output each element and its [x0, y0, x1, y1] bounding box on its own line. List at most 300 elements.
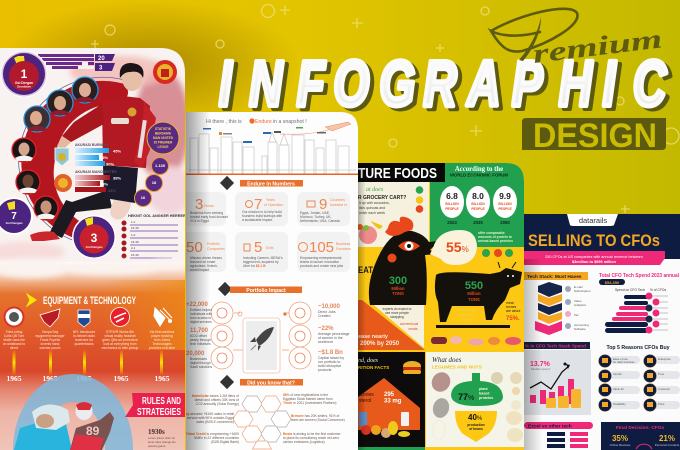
impact figures right: [318, 304, 350, 372]
bar chart: Burnley vs Manchester United: AKURASI MANCHESTER: [75, 170, 117, 174]
bar chart: Burnley vs Manchester United: 25%: [100, 155, 108, 160]
facts right: Bosta is aiming to be the first customer: [283, 432, 341, 436]
egg population stats: 2023: [447, 220, 457, 225]
stat descriptions: agriculture, fintech,: [190, 264, 218, 268]
stat: 300 million tons: [389, 275, 407, 296]
round stat: 7 goals: Gol Dengan: [6, 221, 23, 225]
facts left: (B2B Digital Bank): [211, 440, 239, 444]
list: Herrera goal assists: 1-1: [131, 220, 136, 224]
tech stack icons: Analytics: [574, 303, 587, 307]
round stat: 1 goal: Sundulan: [17, 84, 31, 88]
stat descriptions: products and create new jobs: [300, 264, 343, 268]
note: meat tonnes 75 percent: are about: [506, 309, 520, 313]
stat numbers: 7: [254, 196, 262, 213]
stat descriptions: Uber for $3.1 B: [243, 264, 266, 268]
greeting line: Endure: [255, 119, 272, 125]
impact figures right: our portfolio to: [318, 360, 340, 364]
greeting line: in a snapshot !: [273, 119, 307, 125]
bar chart: Burnley vs Manchester United: 34%: [108, 188, 116, 193]
cream legumes panel: [426, 352, 525, 447]
timeline captions: player tracking: [151, 334, 173, 338]
list: Herrera goal assists: 2-1: [131, 246, 136, 250]
tech stack icons: E-mail: [574, 285, 583, 289]
timeline bars and years: 1965: [114, 374, 129, 383]
list: top 5 reasons CFOs buy: for daily business: [613, 360, 635, 364]
callout: statistik bersama Man United: STATISTIK: [155, 127, 172, 131]
timeline bars and years: 1965: [76, 374, 92, 383]
panel: Selling to CFOs: [524, 214, 680, 450]
greeting line: [206, 118, 307, 125]
list: Herrera goal assists: [122, 214, 189, 258]
timeline captions: Matte uses list: [3, 338, 25, 342]
round stat: 3 goals: Gol Dengan: [86, 245, 103, 249]
stat numbers: of Operation: [264, 203, 283, 207]
cream legumes panel: LEGUMES AND NUTS: [432, 364, 482, 370]
tech stack icons: Subscription: [574, 289, 591, 293]
impact figures right: products: [318, 368, 332, 372]
tech stack icons: Accounting: [574, 323, 589, 327]
stat numbers: 105: [309, 239, 334, 256]
rocket icon card: [243, 318, 280, 373]
bar chart: Burnley vs Manchester United: 38%: [113, 176, 121, 180]
heading: Selling to CFOs: SELLING TO CFOs: [528, 232, 660, 250]
impact figures left: 11,700: [190, 328, 209, 334]
greeting line: Hi there , this is: [206, 119, 242, 125]
orange divider: [186, 174, 358, 175]
black nutrition panel: 33 mg: [384, 398, 402, 404]
black nutrition panel: sterol: [359, 398, 371, 404]
facts right: Egyptian Stock Market came from: [283, 397, 333, 401]
timeline captions: Tampa Bay: [42, 330, 59, 334]
timeline icons: [4, 308, 172, 327]
timeline bars and years: [6, 350, 170, 383]
heading: Portfolio Impact: [218, 282, 302, 296]
stat descriptions: biggest exit, acquired by: [243, 260, 279, 264]
impact figures right: ~22%: [318, 326, 334, 332]
label: eat: EAT: [358, 265, 373, 275]
stat numbers: 50: [186, 239, 203, 256]
tag: tech stack must haves: Tech Stack: Must Haves: [527, 274, 582, 280]
stat numbers: Business: [336, 242, 350, 246]
stat: 550 million tons: Million: [467, 291, 481, 296]
facts left: [175, 394, 239, 444]
cream grocery panel: it up with avocados,: [359, 201, 390, 205]
timeline captions: provides real-time: [149, 346, 175, 350]
navy final decision panel: 35%: [612, 434, 628, 443]
stat numbers: 9: [319, 196, 327, 213]
stat descriptions: Our mission is to help build: [242, 210, 282, 214]
navy final decision panel: [601, 422, 680, 450]
egg population stats: PEOPLE: [471, 207, 485, 211]
list: top 5 reasons CFOs buy: Ease of use: [613, 357, 628, 361]
timeline note: 1930s: amet rules change the: [148, 440, 176, 444]
navy final decision panel: 21%: [659, 434, 675, 443]
bottom color strips: [358, 447, 524, 450]
timeline captions: in-helmet radio: [73, 334, 95, 338]
club badges: [54, 148, 72, 192]
dot grid graphic: [38, 54, 94, 69]
facts right: [283, 393, 345, 444]
black nutrition panel: RITION FACTS: [358, 365, 389, 370]
facts left: sales (B2B E-commerce): [196, 420, 234, 424]
heading: Endure in Numbers: [220, 176, 303, 190]
facts right: to place its consultancy reach net-zero: [283, 436, 339, 440]
small stat circles: 16: [141, 195, 146, 200]
black nutrition panel: nd, does: [358, 358, 379, 364]
timeline captions: virtual reality headset: [104, 334, 136, 338]
chart: CFO tech stack spend growth: % in CFO Tech Stack Spend: [525, 344, 586, 348]
timeline captions: [3, 330, 175, 350]
stat descriptions: Mission-driven theses: [190, 256, 222, 260]
football players: [14, 402, 114, 450]
timeline captions: quarterbacks: [74, 342, 94, 346]
stat numbers: Countries: [330, 198, 345, 202]
pink banner: 250 CFOs at US companies with annual revenue between: [545, 255, 643, 259]
timeline captions: Technologies: [152, 342, 172, 346]
heading: Equipment and Technology: EQUIPMENT & TECHNOLOGY: [43, 295, 136, 307]
impact figures right: ~10,000: [318, 304, 341, 310]
bar chart: Burnley vs Manchester United: 30%: [106, 162, 114, 166]
stat: 300 million tons: Million: [391, 286, 405, 291]
impact figures right: workforce: [318, 340, 333, 344]
cream legumes panel: 77%: [458, 392, 474, 402]
stat numbers: Funds: [204, 204, 214, 208]
heading: Did you know that: Did you know that?: [247, 380, 295, 386]
note: meat tonnes 75 percent: [506, 301, 520, 322]
timeline captions: warmer pouch: [40, 346, 61, 350]
pink banner: $3million to $999 million: [572, 260, 617, 264]
cream legumes panel: plant: [479, 387, 488, 391]
impact figures left: yearly through: [190, 338, 211, 342]
chart: CFO tech stack spend growth: [524, 342, 591, 415]
colored dots: [482, 249, 513, 257]
round stat: 1 goal: [1, 51, 47, 97]
timeline captions: Via field-wireless: [150, 330, 175, 334]
script word: Premium: [491, 9, 664, 69]
timeline bars and years: 1965: [42, 374, 58, 383]
stat descriptions: Business from seeking: [190, 211, 223, 215]
orange wedge with text: 200% by 2050: [360, 341, 400, 347]
chart: CFO tech stack spend growth: Median spend: [531, 367, 550, 371]
stat: 300 million tons: 300: [389, 275, 407, 287]
pink pill: Excel vs other tech: Excel vs other tech: [528, 424, 572, 430]
impact figures right: build disruptive: [318, 364, 341, 368]
heading: Future Foods: TURE FOODS: [358, 165, 437, 182]
chart: total CFO tech spend: [599, 273, 679, 334]
football players: 89: [86, 424, 100, 438]
impact figures left: Businesses: [190, 357, 207, 361]
timeline captions: gives QBs an immersive: [102, 338, 138, 342]
cream grocery panel: R GROCERY CART?: [358, 195, 406, 201]
impact figures right: Average percentage: [318, 332, 350, 336]
stat: 300 million tons: TONS: [392, 291, 404, 296]
stat numbers: Years: [266, 198, 275, 202]
orange wedge with text: conventional: [400, 322, 419, 326]
heading: Endure in Numbers: Endure in Numbers: [247, 182, 295, 188]
round stat: 1 goal: 1: [21, 67, 28, 81]
facts left: CO2 annually (Solar Energy): [196, 402, 239, 406]
green forum panel: According to the: [455, 166, 503, 173]
stat descriptions: social impact: [190, 268, 209, 272]
egg population stats: PEOPLE: [498, 207, 512, 211]
facts right: 86% of new registrations in the: [283, 393, 328, 397]
impact figures left: tCO2 offset: [190, 334, 207, 338]
chart: CFO tech stack spend growth: 13.7%: [530, 361, 551, 368]
list: top 5 reasons CFOs buy: Scalability: [613, 402, 626, 406]
background: orange paint lower section: [0, 258, 190, 450]
chart: total CFO tech spend: $54,350: [605, 280, 620, 285]
tag: tech stack must haves: [524, 272, 588, 280]
bar chart: Burnley vs Manchester United: AKURASI BURNLEY: [75, 143, 110, 147]
timeline captions: receivers for: [75, 338, 94, 342]
impact figures right: Created: [318, 314, 331, 318]
impact flow diagram: [211, 302, 311, 369]
player figure: Ander Herrera: [30, 63, 156, 241]
bar chart: Burnley vs Manchester United: 28%: [100, 182, 108, 186]
bar chart: Burnley vs Manchester United: 45%: [113, 148, 121, 154]
airplane and route: [280, 122, 351, 134]
tech stack icons: Video: [574, 299, 582, 303]
impact figures left: Entitled-helped: [190, 308, 212, 312]
hexagon icon cluster: [233, 396, 291, 449]
callout: statistik bersama Man United: DI PREMIER: [154, 140, 173, 144]
orange wedge with text: experts do expect to: [383, 307, 412, 311]
speech bubble: 55 percent: 55%: [446, 239, 469, 255]
meat products row: [431, 336, 521, 346]
pink banner: [524, 251, 665, 265]
banner: rules and strategies: STRATEGIES: [137, 407, 181, 418]
black nutrition panel: 295: [384, 392, 395, 398]
callout: statistik bersama Man United: LEGUE: [158, 145, 168, 149]
impact figures left: 20,000: [186, 351, 205, 357]
stat descriptions: [190, 210, 343, 272]
timeline captions: from Zebra: [154, 338, 170, 342]
round stat: 1 goal: Gol Dengan: [15, 81, 33, 85]
list: Herrera goal assists: 16-30: [131, 240, 139, 244]
stat descriptions: Including Careem, MENA's: [243, 256, 283, 260]
chart: total CFO tech spend: Spend on CFO Tech: [615, 288, 645, 292]
facts left: diesel and offsets 33K tons of: [195, 398, 239, 402]
stat numbers: Invested in: [330, 203, 347, 207]
stat badges 20 and 3: 20: [98, 56, 105, 62]
heading: INFOGRAPHIC: [219, 48, 671, 122]
badge: DESIGN: DESIGN: [533, 117, 657, 155]
script word: Premium: remium: [531, 23, 664, 69]
egg population stats: BILLION: [445, 202, 459, 206]
rooster figure: [369, 217, 439, 305]
tech stack icons: Tax: [574, 313, 579, 317]
decorative rings and plus signs: [91, 4, 679, 213]
list: top 5 reasons CFOs buy: Enterprise: [658, 357, 671, 361]
list: top 5 reasons CFOs buy: [598, 345, 680, 412]
note: meat tonnes 75 percent: meat: [506, 301, 514, 305]
impact figures right: Direct Jobs: [318, 310, 336, 314]
note: animal order: [456, 308, 477, 322]
facts right: Thndr in 2021 (Investment Platform): [283, 401, 337, 405]
timeline note: 1930s: 1930s: [148, 428, 165, 436]
timeline bars and years: 1965: [154, 374, 170, 383]
egg population stats: 9.9: [499, 191, 511, 201]
stat numbers: 5: [254, 239, 262, 256]
egg population stats: BILLION: [498, 202, 512, 206]
round stat: 3 goals: [72, 215, 116, 259]
impact figures right: of women in the: [318, 336, 343, 340]
navy header: datarails: [579, 216, 607, 225]
small stat circles: [134, 158, 168, 206]
egg population stats: 6.8: [446, 191, 458, 201]
list: top 5 reasons CFOs buy: Customer: [658, 387, 670, 391]
list: top 5 reasons CFOs buy: Vendor: [613, 372, 622, 376]
timeline captions: Third-string: [6, 330, 23, 334]
timeline captions: Frank Pupello: [40, 338, 60, 342]
navy final decision panel: Online Reviews: [610, 443, 631, 447]
heading: Portfolio Impact: Portfolio Impact: [246, 288, 286, 294]
facts right: Brimore has 20K sellers, 91% of: [291, 414, 339, 418]
facts left: Khazenly secured +$15K sales in retail: [175, 412, 234, 416]
impact figures left: +22,000: [186, 302, 209, 308]
cream grocery panel: at does: [366, 187, 384, 193]
stat: 550 million tons: 550: [465, 280, 483, 292]
banner: rules and strategies: RULES AND: [142, 396, 181, 407]
heading shadow: INFOGRAPHIC: [223, 51, 671, 122]
bar chart: Burnley vs Manchester United: [75, 143, 121, 193]
speech bubble: 55 percent: [430, 230, 477, 265]
small stat circles: 1.139: [155, 163, 166, 168]
egg population stats: 8.0: [472, 191, 484, 201]
impact figures right: ~$1.8 Bn: [318, 350, 343, 356]
stat descriptions: founders build startups with: [242, 214, 282, 218]
note on protein: animal-based proteins: [478, 239, 513, 243]
cream legumes panel: proteins: [479, 396, 493, 400]
small stat circles: 18: [152, 180, 157, 185]
pink pill: Excel vs other tech: [524, 422, 593, 430]
panel: Manchester United and NFL infographic: [0, 48, 195, 450]
black nutrition panel: alories: [359, 392, 374, 398]
list: Herrera goal assists: 16-30: [131, 253, 139, 257]
panel: Endure in a snapshot: [175, 112, 358, 450]
stat descriptions: VCs in Egypt: [190, 219, 209, 223]
shadow from panel 3: [524, 259, 542, 450]
note on protein: offer comparable: [478, 231, 505, 235]
stat: 550 million tons: TONS: [468, 297, 480, 302]
stacked layers illustration: [535, 282, 562, 335]
list: top 5 reasons CFOs buy: Value for: [613, 387, 624, 391]
crest: Manchester United: [153, 60, 177, 84]
orange wedge with text: ease nearly: [358, 334, 389, 340]
banner: rules and strategies: [125, 393, 185, 418]
blue ring graphic: [27, 388, 119, 450]
timeline captions: look at everything from: [103, 342, 137, 346]
stat descriptions: Morocco, Turkey, UK,: [300, 215, 332, 219]
stat badges 20 and 3: 3: [99, 66, 103, 72]
round stat: 7 goals: 7: [11, 211, 17, 222]
stat descriptions: focused on smart: [190, 260, 215, 264]
impact figures left: digital services: [190, 320, 212, 324]
cream grocery panel: onish each week: [359, 211, 385, 215]
black nutrition panel: [358, 352, 425, 447]
egg population stats: [440, 186, 517, 225]
impact figures left: SaaS solutions: [190, 365, 212, 369]
note on protein: amounts of protein to: [478, 235, 512, 239]
impact figures left: digital through: [190, 361, 211, 365]
facts left: Tribal Credit is empowering +1600: [186, 432, 239, 436]
stat descriptions: a sustainable impact.: [242, 218, 273, 222]
facts left: KarmSolar saves 1.2M liters of: [192, 394, 239, 398]
orange wedge with text: meats: [409, 327, 418, 331]
list: top 5 reasons CFOs buy: Top 5 Reasons CFOs Buy: [606, 345, 670, 351]
stat numbers: Companies: [207, 247, 225, 251]
impact figures left: [186, 302, 212, 369]
note: meat tonnes 75 percent: 75%.: [506, 316, 520, 322]
orange wedge with text: see more people: [385, 311, 409, 315]
timeline captions: direct: [10, 346, 18, 350]
cream grocery panel: [357, 182, 429, 247]
cream legumes panel: based: [479, 392, 489, 396]
stat badges 20 and 3: [95, 54, 115, 72]
stat descriptions: funded early fund-focused: [190, 215, 228, 219]
impact figures left: individuals with: [190, 312, 212, 316]
list: Herrera goal assists: HEKNIT GOL ANGKER HERRERA: [128, 214, 189, 218]
note: animal order: meat: [462, 318, 470, 322]
timeline note: 1930s: [148, 428, 176, 448]
timeline captions: NFL introduces: [73, 330, 95, 334]
facts left: SMEs in 22 different countries: [194, 436, 239, 440]
egg population stats: BILLION: [471, 202, 485, 206]
stat numbers: Founders: [336, 247, 351, 251]
cream legumes panel: What does: [432, 356, 462, 364]
note: animal order: to produce: [458, 313, 474, 317]
stat numbers: Portfolio: [207, 242, 220, 246]
navy header: [524, 214, 680, 259]
list: Herrera goal assists: 16-30: [131, 226, 139, 230]
stat descriptions: Netherlands, USA, Canada: [300, 219, 340, 223]
timeline captions: invents hand: [41, 342, 60, 346]
stat numbers: Exits: [266, 246, 274, 250]
timeline captions: Colts QB Tom: [4, 334, 24, 338]
timeline captions: STRIVR Works 8th: [106, 330, 134, 334]
egg population stats: PEOPLE: [445, 207, 459, 211]
list: Herrera goal assists: 1-0: [131, 233, 136, 237]
egg population stats: 2035: [473, 220, 483, 225]
stat descriptions: teams to launch innovative: [300, 260, 339, 264]
egg population stats: 2050: [500, 220, 510, 225]
cream legumes panel: of beans: [469, 427, 483, 431]
impact figures left: tech initiatives: [190, 342, 211, 346]
list: top 5 reasons CFOs buy: Time: [658, 372, 665, 376]
stat descriptions: Empowering entrepreneurial: [300, 256, 342, 260]
facts right: them are women (Social Commerce): [291, 418, 345, 422]
orange wedge with text: [358, 300, 425, 350]
round stat: 3 goals: 3: [91, 231, 98, 245]
tech stack icons: [565, 285, 591, 331]
impact figures left: fund access to: [190, 316, 211, 320]
callout: statistik bersama Man United: BERSAMA: [155, 132, 172, 136]
cow figure: [435, 262, 522, 328]
watercolor splash: [0, 56, 195, 262]
facts left: service with 90% outside-Egypt: [187, 416, 234, 420]
timeline captions: on wristband to: [3, 342, 25, 346]
note on protein: [478, 231, 513, 243]
timeline captions: equipment manager: [35, 334, 66, 338]
chart: total CFO tech spend: % of CFOs: [650, 288, 666, 292]
timeline note: 1930s: passing game: [148, 444, 166, 448]
shadow from panel 1: [186, 112, 210, 450]
timeline note: 1930s: Lorem ipsum dolor sit: [148, 436, 175, 440]
heading letters: INFOGRAPHIC: [219, 48, 667, 119]
callout: statistik bersama Man United: MAN UNITED: [153, 136, 174, 140]
facts right: carbon emissions (Logistics): [283, 440, 325, 444]
stat cards: [194, 192, 350, 272]
